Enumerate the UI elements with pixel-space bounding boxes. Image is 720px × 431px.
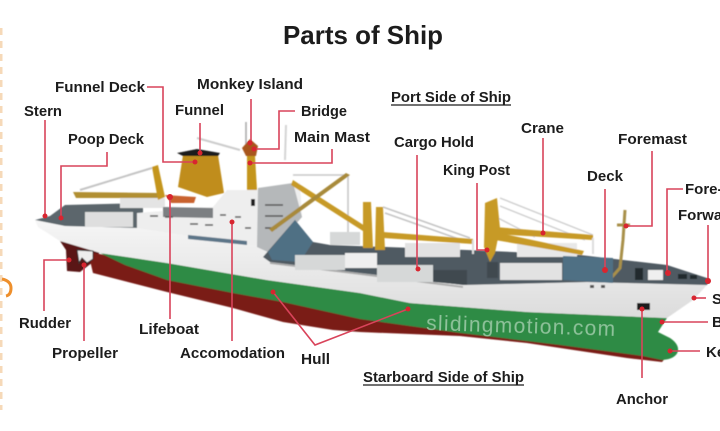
label: stern: Stern xyxy=(24,103,62,120)
label: king post xyxy=(443,162,510,252)
lifeboat xyxy=(165,195,196,203)
label: crane: Crane xyxy=(521,120,564,137)
label: bridge: Bridge xyxy=(301,103,347,120)
section heading: port side: Port Side of Ship xyxy=(391,89,511,106)
label: cargo hold: Cargo Hold xyxy=(394,134,474,151)
label: funnel: Funnel xyxy=(175,102,224,119)
blue deck patch xyxy=(268,220,313,262)
label: propeller xyxy=(52,262,118,362)
label: anchor: Anchor xyxy=(616,391,668,408)
label: funnel deck: Funnel Deck xyxy=(55,79,146,96)
cargo hold covers xyxy=(295,232,663,282)
label: stern xyxy=(24,103,62,218)
label: accomodation xyxy=(180,220,285,362)
cargo deck xyxy=(263,220,710,285)
foredeck fittings xyxy=(563,256,613,283)
label: deck: Deck xyxy=(587,168,624,185)
label: monkey island: Monkey Island xyxy=(197,76,303,93)
label: funnel xyxy=(175,102,224,156)
label: fore-castle xyxy=(665,181,720,276)
hull bottom red xyxy=(88,252,672,362)
funnel xyxy=(177,149,224,197)
label: rudder xyxy=(19,258,72,332)
label: funnel deck xyxy=(55,79,198,164)
midship cranes xyxy=(363,202,473,254)
title: Parts of Ship xyxy=(283,20,443,50)
label: forward xyxy=(678,207,720,284)
label: foremast: Foremast xyxy=(618,131,687,148)
label: hull xyxy=(270,290,410,368)
label: hull: Hull xyxy=(301,351,330,368)
hull sheer stripe xyxy=(270,263,463,287)
superstructure xyxy=(137,183,302,258)
label: deck xyxy=(587,168,624,273)
aft crane xyxy=(73,165,165,200)
label: rudder: Rudder xyxy=(19,315,71,332)
label: poop deck xyxy=(58,131,145,220)
label: bridge xyxy=(252,103,347,152)
forward cranes xyxy=(484,198,593,278)
masts xyxy=(197,122,286,190)
propeller xyxy=(77,250,93,263)
rudder and stern xyxy=(60,241,100,272)
label: poop deck: Poop Deck xyxy=(68,131,145,148)
label: main mast xyxy=(248,129,370,166)
label: bow xyxy=(660,314,720,331)
label: main mast: Main Mast xyxy=(294,129,370,146)
label: stem xyxy=(692,291,720,308)
ship illustration xyxy=(35,122,710,362)
label: monkey island xyxy=(197,76,303,146)
label: lifeboat: Lifeboat xyxy=(139,321,199,338)
aft deck block xyxy=(35,203,143,228)
forward crossing cranes xyxy=(269,173,365,232)
label: anchor xyxy=(616,306,668,408)
hold dark block xyxy=(433,270,467,285)
section heading: starboard side: Starboard Side of Ship xyxy=(363,369,524,386)
label: foremast xyxy=(618,131,687,228)
label: keel xyxy=(668,344,720,361)
watermark: slidingmotion.com xyxy=(426,312,615,341)
anchor fitting xyxy=(637,303,650,310)
label: accomodation: Accomodation xyxy=(180,345,285,362)
page edge decoration xyxy=(1,28,11,410)
label: cargo hold xyxy=(394,134,474,272)
hull white topsides xyxy=(35,220,707,318)
label: lifeboat xyxy=(139,194,199,338)
label: crane xyxy=(521,120,564,236)
hull green band xyxy=(100,253,678,360)
foremast xyxy=(612,210,630,277)
label: propeller: Propeller xyxy=(52,345,118,362)
label: king post: King Post xyxy=(443,162,510,179)
hawse ports xyxy=(590,285,605,288)
